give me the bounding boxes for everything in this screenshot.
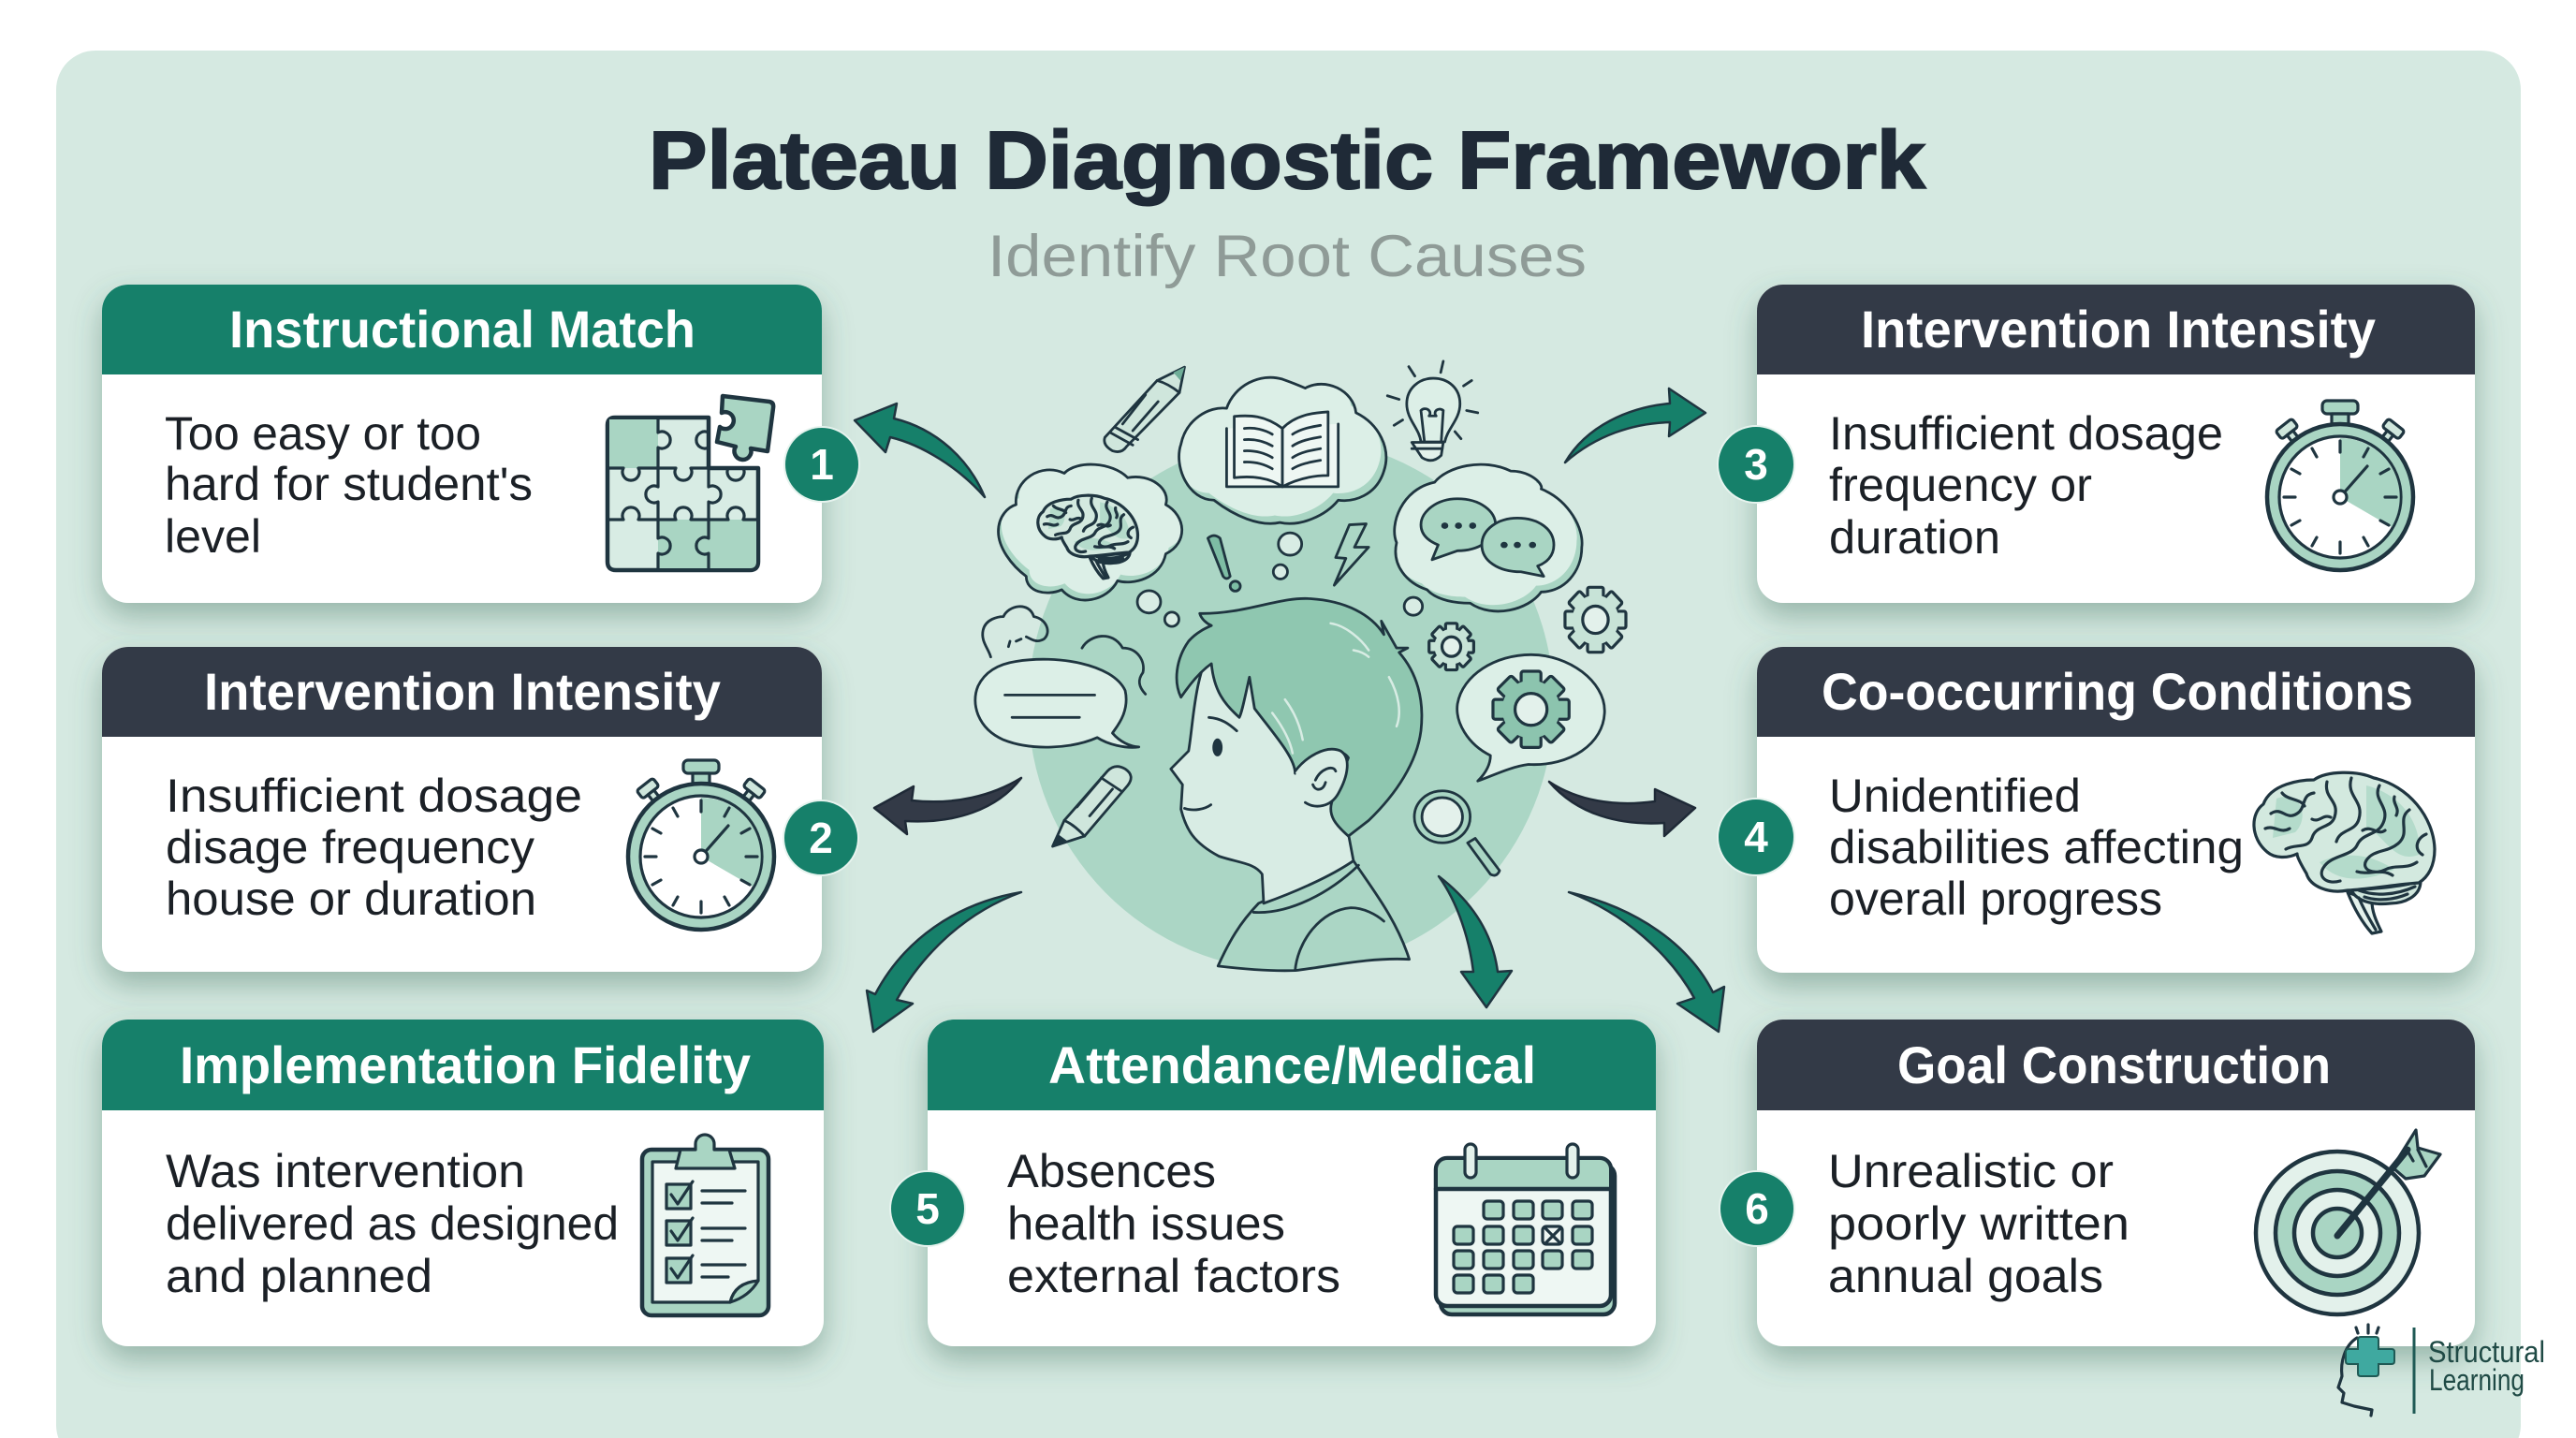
logo: Structural Learning: Structural <box>2428 1335 2545 1369</box>
badge 4 <box>1718 799 1794 875</box>
panel: card 6 Goal Construction <box>1720 1020 2475 1346</box>
thought cloud: book <box>1174 371 1386 523</box>
body text <box>166 1145 619 1302</box>
ear <box>1295 749 1347 806</box>
body text: external factors <box>1007 1250 1340 1302</box>
icon: puzzle <box>607 396 773 570</box>
icon: open book <box>1226 412 1339 487</box>
heading: Intervention Intensity <box>1861 300 2376 359</box>
arrow 1 to Instructional Match <box>855 404 985 497</box>
arrow to Goal Construction <box>1569 892 1724 1032</box>
body text: duration <box>1829 511 2000 564</box>
icon: pencil lower <box>1053 767 1131 846</box>
body text: health issues <box>1007 1197 1285 1250</box>
title: Plateau Diagnostic Framework <box>649 115 1926 206</box>
subtitle: Identify Root Causes <box>988 224 1587 289</box>
panel: card 4 Co-occurring Conditions <box>1718 647 2475 973</box>
badge 1: 1 <box>810 440 834 489</box>
heading: Goal Construction <box>1897 1035 2331 1094</box>
body text: and planned <box>166 1250 432 1302</box>
marks: exclamation, dots and bolt <box>1137 524 1423 626</box>
speech bubble left <box>975 659 1139 747</box>
heading: Attendance/Medical <box>1048 1035 1536 1094</box>
eye and mouth <box>1184 717 1237 810</box>
badge 2 <box>783 800 858 875</box>
body text: disabilities affecting <box>1829 821 2244 873</box>
panel: card 3 Intervention Intensity <box>1718 285 2475 603</box>
badge 1 <box>784 427 859 502</box>
icon: brain <box>2254 772 2435 933</box>
body text <box>1007 1145 1340 1302</box>
badge 5 <box>890 1171 965 1246</box>
illustration: child with thought bubbles <box>975 361 1626 971</box>
arrow to Implementation Fidelity <box>867 892 1021 1032</box>
badge 4: 4 <box>1744 813 1768 861</box>
arrow to Attendance/Medical <box>1439 876 1512 1007</box>
neck and face <box>1171 641 1354 903</box>
badge 5: 5 <box>915 1184 940 1233</box>
heading: Intervention Intensity <box>204 662 721 721</box>
body text: Absences <box>1007 1145 1216 1197</box>
hair <box>1177 598 1422 836</box>
icon: light bulb <box>1387 361 1478 461</box>
badge 3: 3 <box>1744 440 1768 489</box>
body text: Was intervention <box>166 1145 525 1197</box>
icon: stopwatch <box>2267 401 2413 570</box>
icon: pencil top <box>1105 367 1184 452</box>
panel: card Implementation Fidelity <box>102 1020 824 1346</box>
panel: card 2 Intervention Intensity <box>102 647 858 972</box>
background circle <box>1029 437 1554 971</box>
arrow 4 to Co-occurring Conditions <box>1549 782 1695 836</box>
logo: Structural Learning: Learning <box>2429 1363 2525 1397</box>
body text <box>165 407 533 563</box>
body text: house or duration <box>166 873 536 925</box>
icon: gear small <box>1429 624 1473 670</box>
body text: Unidentified <box>1829 770 2081 822</box>
body text: disage frequency <box>166 821 534 873</box>
heading: Instructional Match <box>229 300 695 359</box>
panel: card 5 Attendance/Medical <box>890 1020 1656 1346</box>
body text: frequency or <box>1829 459 2092 511</box>
body text: annual goals <box>1828 1250 2103 1302</box>
badge 2: 2 <box>809 814 833 862</box>
icon: chat bubbles <box>1421 499 1554 577</box>
body text: poorly written <box>1828 1197 2130 1250</box>
badge 3 <box>1718 426 1794 503</box>
icon: target <box>2256 1130 2440 1314</box>
arrow 2 to Intervention Intensity <box>874 778 1021 834</box>
icon: stopwatch <box>628 760 774 930</box>
body text: Insufficient dosage <box>1829 407 2223 460</box>
thought cloud: brain <box>999 458 1185 600</box>
icon: gear large <box>1565 587 1626 653</box>
body text <box>1829 770 2244 925</box>
arrow 3 to Intervention Intensity <box>1565 389 1705 462</box>
heading: Implementation Fidelity <box>180 1035 751 1094</box>
badge 6 <box>1720 1171 1794 1246</box>
thought cloud: chat <box>1389 458 1582 611</box>
body text: overall progress <box>1829 873 2162 925</box>
icon: brain <box>1038 495 1138 579</box>
body text <box>1828 1145 2130 1302</box>
body text: level <box>165 510 261 563</box>
icon: calendar <box>1436 1144 1615 1314</box>
body text: Unrealistic or <box>1828 1145 2114 1197</box>
body text: hard for student's <box>165 458 533 510</box>
panel: card 1 Instructional Match <box>102 285 859 603</box>
badge 6: 6 <box>1745 1184 1769 1233</box>
icon: small clouds <box>983 607 1146 694</box>
logo: Structural Learning <box>2338 1325 2545 1416</box>
body text <box>1829 407 2223 564</box>
body text: Insufficient dosage <box>166 770 582 822</box>
speech bubble gear <box>1457 654 1604 781</box>
body text: Too easy or too <box>165 407 481 460</box>
child figure <box>1171 598 1422 971</box>
shirt <box>1218 860 1410 971</box>
body text <box>166 770 582 925</box>
heading: Co-occurring Conditions <box>1822 662 2413 721</box>
icon: magnifying glass <box>1414 791 1500 875</box>
icon: clipboard <box>642 1135 768 1315</box>
body text: delivered as designed <box>166 1197 619 1250</box>
